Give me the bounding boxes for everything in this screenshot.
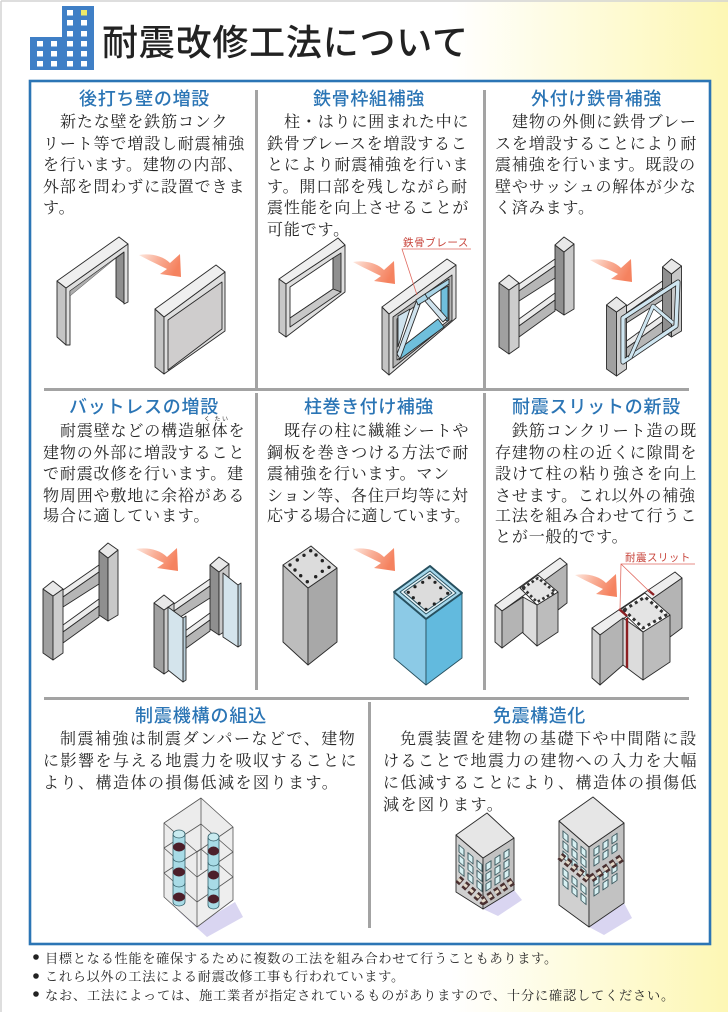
footnotes (33, 950, 675, 1003)
arrow (353, 261, 395, 284)
illustration: frame to wall (57, 237, 225, 374)
panel: 柱巻き付け補強 (267, 397, 471, 685)
heading: 免震構造化 (493, 706, 586, 726)
arrow (575, 574, 617, 597)
illustration: columns to buttress (43, 543, 241, 682)
panel: 鉄骨枠組補強 (267, 89, 471, 375)
text block: より、構造体の損傷低減を図ります。 (43, 774, 339, 792)
text block (43, 730, 358, 792)
heading: バットレスの増設 (69, 397, 219, 417)
text block: 応する場合に適しています。 (267, 506, 471, 525)
text block: 免震装置を建物の基礎下や中間階に設 (400, 730, 698, 748)
text block (267, 113, 469, 239)
panel: 外付け鉄骨補強 (495, 89, 697, 376)
illustration: base-isolated building (456, 813, 522, 916)
text block: 震補強を行います。既設の (495, 156, 696, 174)
text block (43, 113, 245, 217)
text block: 鉄筋コンクリート造の既 (512, 422, 697, 440)
panel: 制震機構の組込 (43, 706, 358, 937)
footnotes: なお、工法によっては、施工業者が指定されているものがありますので、十分に確認してください。 (45, 987, 675, 1003)
text block: 外部を問わずに設置できま (43, 178, 245, 196)
text block (267, 422, 471, 525)
text block (495, 113, 697, 217)
heading: 鉄骨枠組補強 (313, 89, 425, 109)
text block: 震補強を行います。マン (267, 465, 450, 483)
text block: 既存の柱に繊維シートや (284, 422, 469, 440)
ruby: く たい (204, 416, 228, 423)
footnotes: これら以外の工法による耐震改修工事も行われています。 (45, 968, 405, 984)
main frame (30, 81, 710, 944)
text block: に影響を与える地震力を吸収することに (43, 751, 358, 770)
text block: す。開口部を残しながら耐 (267, 178, 468, 196)
text block: 鉄骨ブレースを増設するこ (267, 135, 468, 153)
text block (43, 422, 245, 525)
illustration: damper structure (164, 798, 243, 937)
text block: 設けて柱の粘り強さを向上 (495, 465, 697, 483)
panel: 後打ち壁の増設 (43, 89, 245, 374)
title: 耐震改修工法について (102, 22, 468, 63)
illustration: column to wrapped column (283, 546, 462, 685)
text block: ション等、各住戸均等に対 (267, 487, 469, 505)
text block: 物周囲や敷地に余裕がある (43, 486, 245, 505)
arrow (590, 259, 632, 282)
callout: 耐震スリット: 耐震スリット (625, 551, 691, 564)
illustration: column to slit (495, 558, 682, 685)
text block: リート等で増設し耐震補強 (43, 135, 245, 153)
text block: 耐震壁などの構造躯体を (60, 422, 245, 440)
arrow (136, 548, 178, 571)
text block: 可能です。 (267, 221, 350, 239)
panel: 免震構造化 (383, 706, 698, 935)
text block: 壁やサッシュの解体が少な (495, 178, 697, 196)
text block: 震性能を向上させることが (267, 199, 469, 217)
text block: 柱・はりに囲まれた中に (284, 113, 469, 131)
arrow (139, 254, 181, 277)
text block: 存建物の柱の近くに隙間を (495, 444, 697, 462)
icon: building logo (30, 6, 94, 70)
text block: に低減することにより、構造体の損傷低 (383, 774, 698, 792)
arrow (353, 548, 395, 571)
panel: 耐震スリットの新設 (495, 397, 697, 685)
text block: 場合に適しています。 (43, 506, 210, 525)
text block (383, 730, 698, 814)
heading: 制震機構の組込 (135, 706, 267, 726)
text block: 減を図ります。 (383, 796, 504, 814)
text block: を行います。建物の内部、 (43, 156, 244, 174)
text block: 建物の外部に増設すること (43, 444, 245, 462)
callout: 鉄骨ブレース (402, 236, 471, 295)
text block: 鋼板を巻きつける方法で耐 (267, 444, 469, 462)
panel: バットレスの増設 (43, 397, 245, 682)
callout: 鉄骨ブレース: 鉄骨ブレース (403, 236, 469, 249)
illustration: columns to external brace (499, 237, 682, 376)
heading: 柱巻き付け補強 (304, 397, 434, 417)
text block: けることで地震力の建物への入力を大幅 (383, 751, 698, 770)
text block: 工法を組み合わせて行うこ (495, 507, 697, 525)
text block: 新たな壁を鉄筋コンク (60, 113, 228, 131)
text block: で耐震改修を行います。建 (43, 465, 244, 483)
text block: 建物の外側に鉄骨ブレー (512, 113, 697, 131)
text block: とが一般的です。 (495, 528, 629, 546)
heading: 外付け鉄骨補強 (531, 89, 662, 109)
heading: 耐震スリットの新設 (512, 397, 681, 417)
text block: とにより耐震補強を行いま (267, 156, 469, 174)
text block: スを増設することにより耐 (495, 135, 697, 153)
text block: く済みます。 (495, 199, 595, 217)
text block: す。 (43, 200, 75, 217)
text block: 制震補強は制震ダンパーなどで、建物 (60, 730, 356, 748)
illustration: frame to braced frame (279, 238, 456, 375)
footnotes: 目標となる性能を確保するために複数の工法を組み合わせて行うこともあります。 (45, 950, 558, 966)
text block: させます。これ以外の補強 (495, 487, 696, 505)
callout: 耐震スリット (620, 551, 695, 610)
illustration: mid-storey isolated building (559, 797, 632, 935)
heading: 後打ち壁の増設 (79, 89, 210, 109)
text block (495, 422, 697, 546)
